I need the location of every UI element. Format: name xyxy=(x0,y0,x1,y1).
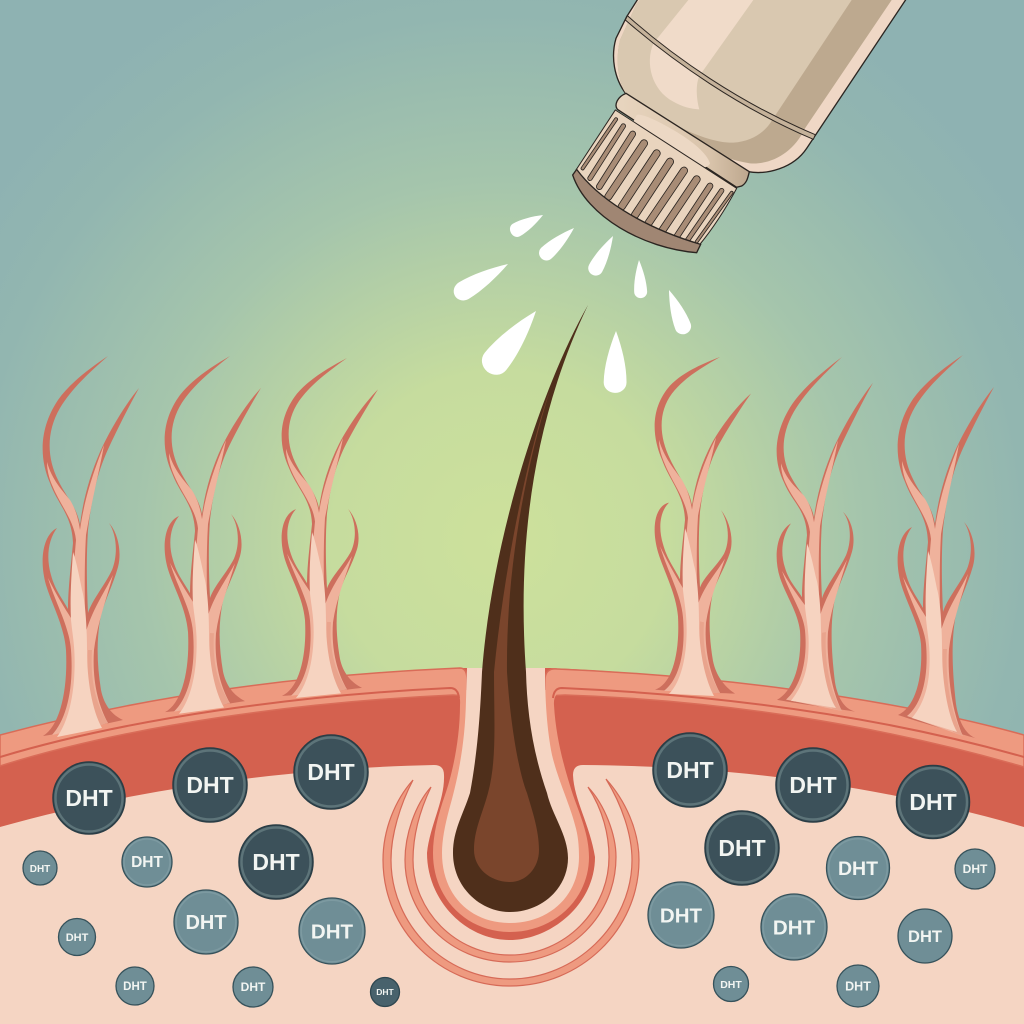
DHT medium 2 xyxy=(174,890,238,954)
droplet 6 xyxy=(450,256,513,304)
band line right xyxy=(553,688,1024,757)
DHT medium 4: DHT xyxy=(838,858,878,880)
DHT large 7 xyxy=(896,766,970,838)
DHT small 3: DHT xyxy=(123,981,147,993)
DHT medium 3: DHT xyxy=(311,920,354,944)
central hair with root bulb xyxy=(453,305,588,912)
droplets xyxy=(450,209,693,393)
DHT small 1: DHT xyxy=(30,864,50,875)
droplet 3 xyxy=(586,232,620,278)
tube body xyxy=(614,0,907,172)
DHT small 1 xyxy=(23,851,57,885)
DHT large 1 xyxy=(53,762,125,834)
DHT large 6 xyxy=(776,748,850,822)
DHT molecules, right side xyxy=(648,733,995,1007)
follicle pink sheath xyxy=(433,690,589,932)
tube groove xyxy=(625,16,815,139)
DHT small 4: DHT xyxy=(241,980,266,994)
collar highlight xyxy=(633,115,710,167)
DHT large 5: DHT xyxy=(666,757,714,783)
DHT large 4 xyxy=(239,825,313,899)
hair tuft 1 xyxy=(43,356,139,737)
inner crescent xyxy=(405,787,616,962)
cap ribs xyxy=(583,119,732,242)
DHT large 3: DHT xyxy=(307,759,355,785)
DHT large 1: DHT xyxy=(65,785,113,811)
DHT large 7: DHT xyxy=(909,789,957,815)
tube collar xyxy=(616,93,749,187)
DHT small 6 xyxy=(955,849,995,889)
follicle opening xyxy=(442,668,579,923)
brown hair core xyxy=(474,390,550,882)
DHT small 8 xyxy=(837,965,879,1007)
tube shadow xyxy=(618,0,892,163)
DHT large 8: DHT xyxy=(718,835,766,861)
DHT large 8 xyxy=(705,811,779,885)
DHT small 4 xyxy=(233,967,273,1007)
hair tuft 2 xyxy=(165,353,261,718)
DHT small 3 xyxy=(116,967,154,1005)
DHT small 6: DHT xyxy=(963,862,988,876)
tube highlight xyxy=(650,0,753,109)
DHT small 8: DHT xyxy=(845,980,871,994)
DHT small 5 xyxy=(370,978,400,1006)
lower skin tissue xyxy=(0,730,1024,1024)
band line left xyxy=(0,688,459,757)
DHT medium 4 xyxy=(826,836,890,900)
droplet 2 xyxy=(536,222,579,264)
red dermis layer xyxy=(0,668,1024,940)
droplet 5 xyxy=(661,287,693,337)
left pink epidermis band xyxy=(0,668,467,766)
DHT small 5: DHT xyxy=(376,987,395,997)
skin layers with follicle xyxy=(0,668,1024,986)
hair tuft 4 xyxy=(655,342,751,713)
DHT small 7: DHT xyxy=(720,979,742,991)
DHT large 2: DHT xyxy=(186,772,234,798)
hair tuft 5 xyxy=(777,353,873,722)
dark hair shaft xyxy=(453,305,588,912)
hair tuft 6 xyxy=(898,355,994,739)
DHT small 2: DHT xyxy=(66,932,89,944)
DHT medium 6: DHT xyxy=(773,916,816,940)
DHT large 3 xyxy=(294,735,368,809)
DHT small 7 xyxy=(714,966,748,1002)
DHT medium 7: DHT xyxy=(908,928,942,946)
right pink epidermis band xyxy=(545,669,1024,767)
cap body xyxy=(576,110,737,245)
tube panel xyxy=(618,0,852,143)
DHT medium 5: DHT xyxy=(660,904,703,928)
DHT large 5 xyxy=(653,733,727,807)
hair tuft 3 xyxy=(282,353,378,705)
DHT small 2 xyxy=(58,918,96,956)
DHT medium 5 xyxy=(648,882,714,948)
DHT medium 3 xyxy=(299,898,365,964)
DHT medium 6 xyxy=(761,894,827,960)
outer crescent xyxy=(383,779,639,986)
cap rim xyxy=(573,169,701,253)
DHT molecules, left side xyxy=(23,735,400,1007)
DHT medium 7 xyxy=(898,909,952,963)
droplet 4 xyxy=(633,260,647,298)
DHT medium 2: DHT xyxy=(185,912,227,934)
droplet 7 xyxy=(477,302,547,380)
DHT medium 1: DHT xyxy=(131,854,163,871)
tube of topical treatment xyxy=(573,0,907,253)
DHT large 4: DHT xyxy=(252,849,300,875)
DHT medium 1 xyxy=(122,837,172,887)
DHT large 2 xyxy=(173,748,247,822)
droplet 1 xyxy=(507,209,547,239)
DHT large 6: DHT xyxy=(789,772,837,798)
droplet 8 xyxy=(604,331,627,393)
